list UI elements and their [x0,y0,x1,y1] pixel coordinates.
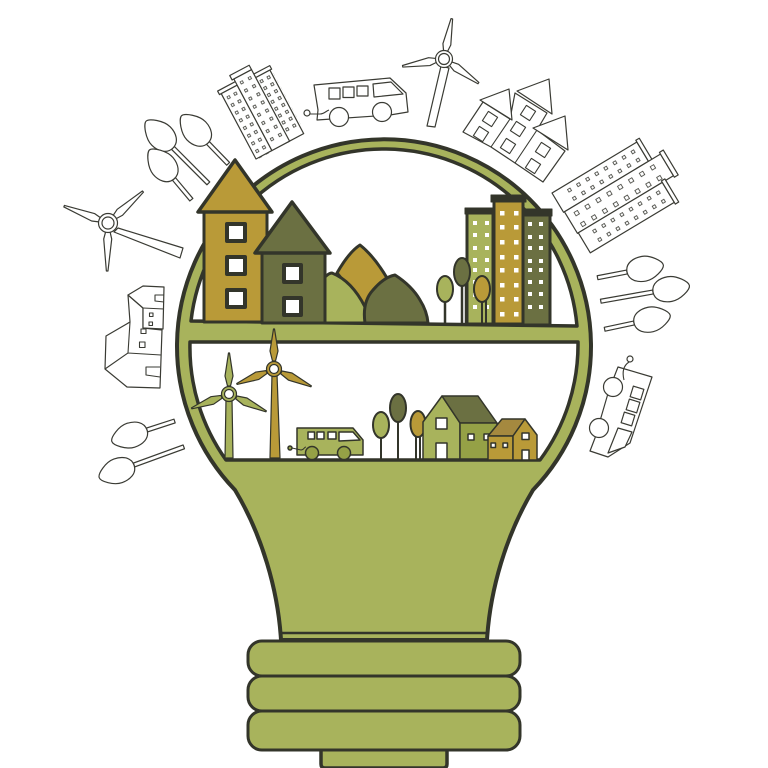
icon: outline wind turbine top [402,18,481,127]
lower scene: trees [373,394,426,459]
bulb neck line [281,632,487,634]
icon: outline apartment block top left [214,57,306,161]
dark green house [255,202,330,323]
lower wind turbine: gold [235,329,313,458]
icon: outline bus top [304,78,408,126]
icon: outline houses top right [463,79,568,182]
icon: outline houses left [105,286,164,388]
skyscraper: light green [465,208,495,324]
icon: outline bus right [590,356,652,457]
tall gold house [198,160,272,322]
lower scene: green van [288,428,363,460]
bulb screw ring 1 [248,641,520,676]
icon: outline trees left [137,107,237,208]
upper scene: hills [325,245,428,323]
bulb base cap [321,748,447,768]
skyscraper: dark green [522,209,552,325]
icon: outline trees lower left [95,409,188,489]
bulb glass body [177,139,591,640]
light bulb [177,139,591,768]
upper scene: trees [437,276,482,323]
icon: outline trees right [595,253,692,341]
bulb screw ring 3 [248,711,520,750]
bulb screw ring 2 [248,676,520,711]
lower scene: green house [423,396,497,459]
skyscraper: gold [491,195,526,324]
icon: outline wind turbine left [63,189,183,271]
icon: outline apartment blocks right [551,131,690,256]
upper scene: trees in front of skyscraper [454,258,490,323]
lower scene: small gold house [488,419,537,460]
lower window of bulb [190,342,578,460]
upper window of bulb [191,149,577,326]
lower wind turbine: green [190,353,268,458]
